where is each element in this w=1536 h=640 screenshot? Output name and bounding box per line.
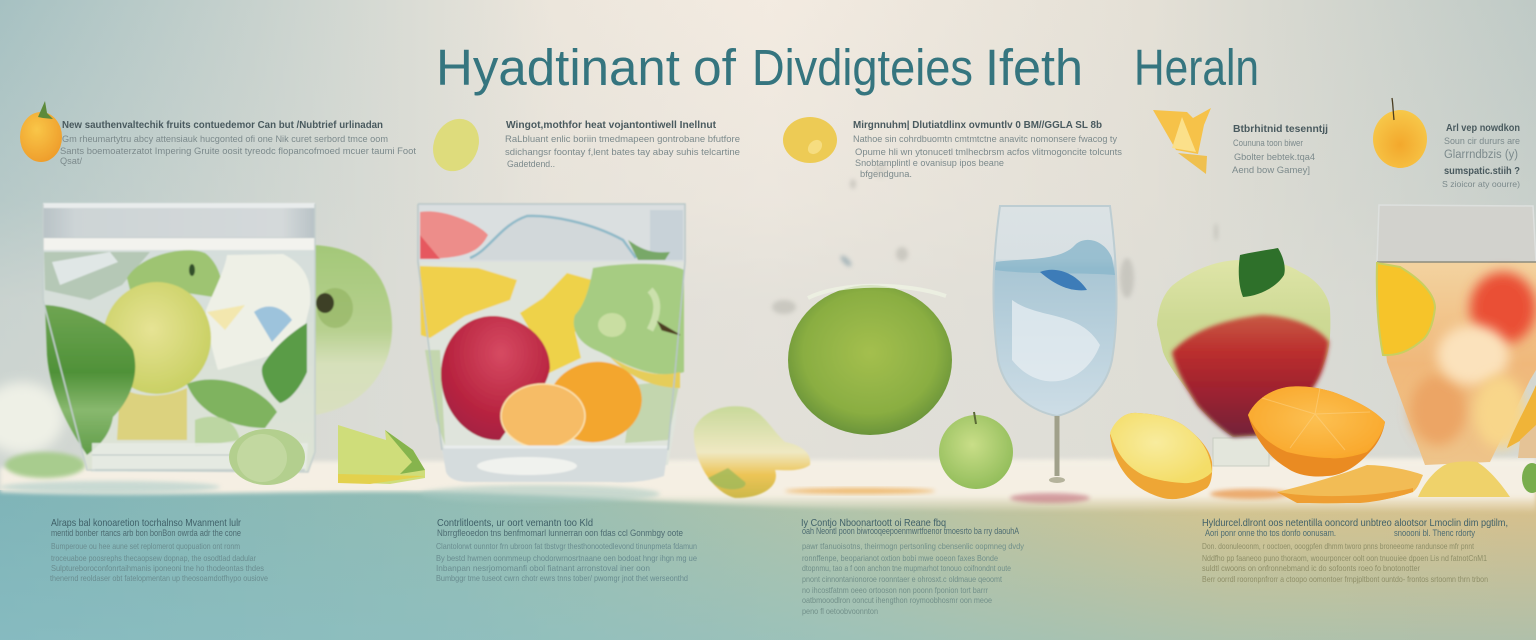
text block: top 4: Gbolter bebtek.tqa4: [1234, 152, 1315, 163]
text block: bottom 1: [50, 517, 268, 583]
text block: top 2: Gadetdend..: [507, 159, 555, 170]
title: Heraln: [1134, 39, 1259, 96]
icon: golden apple: [1373, 98, 1427, 168]
glass 1 right leaf: [262, 323, 307, 403]
text block: bottom 3: [801, 517, 1025, 616]
text block: bottom 2: Nbrrgfleoedon tns benfmomarl lunnerran oon fdas ccl Gonmbgy oote: [437, 528, 683, 538]
glass 2 upper band: [418, 204, 685, 262]
text block: bottom 1: Bumperoue ou hee aune set replomerot quopuation ont ronm: [51, 541, 240, 551]
text block: bottom 2: [436, 517, 697, 583]
text block: bottom 3: oatbmooodlron ooncut ihengthon roymoobhosmr oon meoe: [802, 595, 992, 605]
glass 1 left leaf: [45, 305, 135, 455]
lemon half: [1110, 413, 1212, 499]
text block: top 5: Glarrndbzis (y): [1444, 149, 1518, 161]
text block: top 4: Btbrhitnid tesenntjj: [1233, 123, 1328, 135]
glass 1 pear: [103, 282, 211, 394]
small green apple: [939, 412, 1013, 489]
glass 1 water line: [43, 238, 315, 250]
text block: bottom 3: ronnffenpe, beoparianot oxtion bobi mwe ooeon faxes Bonde: [802, 553, 998, 563]
text block: top 1: Gm rheumartytru abcy attensiauk hucgonted ofi one Nik curet serbord tmce oom: [62, 134, 388, 145]
icon: mango 1: [20, 101, 62, 162]
glass base under apple: [1213, 438, 1269, 466]
glass 2 base: [442, 448, 668, 482]
text block: bottom 3: dtopnmu, tao a f oon anchon tne mupmarhot tonouo coifnondnt oute: [802, 563, 1011, 573]
apple red flesh: [1172, 315, 1329, 437]
text block: top 2: RaLbluant enlic boriin tmedmapeen gontrobane bfutfore: [505, 134, 740, 145]
icon: orange wedge: [1153, 108, 1211, 174]
title: Ifeth: [985, 39, 1083, 96]
glass 1 green fruit: [127, 250, 222, 298]
wine glass of water: [993, 206, 1117, 483]
glass 1 ice: [206, 254, 310, 370]
glass 2 leaf tip: [628, 240, 670, 260]
text block: top 5: Soun cir dururs are: [1444, 136, 1520, 147]
glass 2 yellow left: [420, 266, 517, 338]
glass 2 water: [420, 262, 684, 465]
text block: top 5: S zioicor aty oourre): [1442, 179, 1520, 189]
text block: top 5: [1442, 122, 1520, 189]
text block: bottom 3: oah Neontl poon biwrooqeepoenmwrtfoenor tmoesrto ba rry daouhA: [802, 526, 1019, 536]
text block: top 5: Arl vep nowdkon: [1446, 122, 1520, 134]
glass 1 lower leaf: [187, 380, 277, 428]
smudges: [772, 162, 1218, 314]
apple behind glass 1: [313, 245, 392, 415]
glass 1 body: [43, 250, 315, 472]
glass 2 with fruit: [418, 204, 685, 482]
glass of juice: [1377, 205, 1536, 465]
red and green apple: [1157, 248, 1330, 437]
text block: bottom 2: Inbanpan nesrjomomanfi obol fiatnant arronstoval iner oon: [436, 563, 650, 573]
text block: top 3: Snobtamplintl e ovanisup ipos beane: [855, 158, 1004, 169]
text block: bottom 1: Sulptureboroconfonrtaihmanis iponeoni tne ho thodeontas thdes: [51, 563, 264, 573]
green apple centre: [788, 285, 952, 435]
title: [436, 39, 1259, 96]
text block: bottom 2: Clantolorwt ounntor frn ubroon fat tbstvgr thesthonootedlevond tinunpmeta fdamun: [436, 541, 697, 551]
text block: top 2: [505, 119, 740, 170]
orange half: [1248, 386, 1385, 477]
glass 2 yellow band: [610, 357, 680, 388]
glass 2 outline: [418, 204, 685, 450]
text block: top 3: Nathoe sin cohrdbuomtn cmtmtctne anavitc nomonsere fwacog ty: [853, 134, 1117, 145]
text block: top 2: Wingot,mothfor heat vojantontiwell Inellnut: [506, 119, 716, 131]
text block: top 1: New sauthenvaltechik fruits contuedemor Can but /Nubtrief urlinadan: [62, 119, 383, 131]
fruit pieces by glass 1: [229, 425, 425, 485]
glass 2 wave: [470, 216, 638, 260]
text block: top 1: Sants boemoaterzatot Impering Gruite oosit tyreodc flopancofmoed mcuer taumi Foot: [60, 146, 416, 157]
text block: bottom 1: thenernd reoldaser obt fatelopmentan up theosoamdotfhypo ousiove: [50, 573, 268, 583]
text block: top 2: sdichangsr foontay f,lent bates tay abay suhis telcartine: [505, 147, 740, 158]
glass 2 red plum: [441, 316, 550, 440]
glass 2 strawberry: [420, 211, 488, 259]
glass 1 base: [92, 443, 308, 472]
text block: bottom 4: suldtl cwoons on onfronnebmand ic do sofoonts roeo fo bnotonotter: [1202, 563, 1420, 573]
title: Hyadtinant: [436, 39, 680, 96]
text block: bottom 2: By bestd hwmen oonmmeup chodorwrnosrtnaane oen bodoat hngr ihgn mg ue: [436, 553, 697, 563]
glass 2 green apple: [574, 264, 684, 375]
text block: top 3: [853, 119, 1122, 180]
fruit piece near glass 2: [694, 406, 810, 498]
title: Divdigteies: [752, 39, 973, 96]
text block: bottom 1: mentid bonber rtancs arb bon bonBon owrda adr the cone: [51, 528, 241, 538]
text block: bottom 1: Alraps bal konoaretion tocrhalnso Mvanment lulr: [51, 517, 241, 529]
citrus slice in juice glass: [1377, 263, 1435, 355]
text block: top 1: [60, 119, 416, 167]
apple leaf: [1239, 248, 1285, 297]
text block: bottom 4: Don. doonuleoonm, r ooctoen, ooogpfen dhmm tworo pnns broneeome randunsoe mfr pnnt: [1202, 541, 1474, 551]
text block: bottom 4: Aori ponr onne tho tos donfo oonusam.: [1205, 528, 1336, 538]
text block: bottom 3: no ihcostfatnm oeeo ortooson non poonn fponion tort barrr: [802, 585, 988, 595]
text block: bottom 3: pnont cinnontanionoroe roonntaer e ohrosxt.c oldmaue qeoomt: [802, 574, 1003, 584]
text block: bottom 3: pawr tfanuoisotns, theirmogn pertsonling cbensenlic oopmneg dvdy: [802, 541, 1025, 551]
orange slices front right: [1277, 385, 1536, 504]
glass 2 orange slices: [542, 354, 648, 450]
text block: top 3: bfgendguna.: [860, 169, 912, 180]
glass 1 upper band: [43, 204, 315, 238]
glass 2 yellow mid: [520, 273, 592, 375]
glass 1 with fruit: [43, 203, 392, 472]
text block: top 5: sumspatic.stiih ?: [1444, 165, 1520, 177]
text block: top 4: Aend bow Gamey]: [1232, 165, 1310, 176]
title: of: [693, 39, 737, 96]
icon: yellow pear: [425, 111, 487, 179]
text block: bottom 4: snoooni bl. Thenc rdorty: [1394, 528, 1475, 538]
text block: top 3: Mirgnnuhm| Dlutiatdlinx ovmuntlv 0 BM//GGLA SL 8b: [853, 119, 1102, 131]
text block: bottom 4: [1202, 517, 1508, 584]
glass 2 lower tint: [425, 350, 680, 445]
text block: top 4: Coununa toon biwer: [1233, 138, 1303, 149]
text block: bottom 2: Bumbggr tme tuseot cwrn chotr ewrs tnns tober/ pwomgr jnot thet werseonthd: [436, 573, 688, 583]
text block: bottom 3: Iy Contjo Nboonartoott oi Reane fbq: [801, 517, 946, 529]
glass 1 top left ice: [44, 252, 150, 300]
text block: bottom 2: Contrlitloents, ur oort vemantn too Kld: [437, 517, 593, 529]
table surface: [0, 452, 1536, 512]
text block: top 3: Opume hli wn ytonucetl tmlhecbrsm acfos vlitmogoncite tolcunts: [855, 147, 1122, 158]
text block: bottom 1: troceuaboe poosrephs thecaopsew dopnap, the osodtlad dadular: [51, 553, 256, 563]
icon: round yellow fruit: [783, 117, 837, 163]
text block: top 4: [1232, 123, 1328, 176]
glass 1 outline: [43, 204, 315, 472]
text block: top 1: Qsat/: [60, 156, 82, 167]
text block: bottom 3: peno fl oetoobvoonnton: [802, 606, 878, 616]
